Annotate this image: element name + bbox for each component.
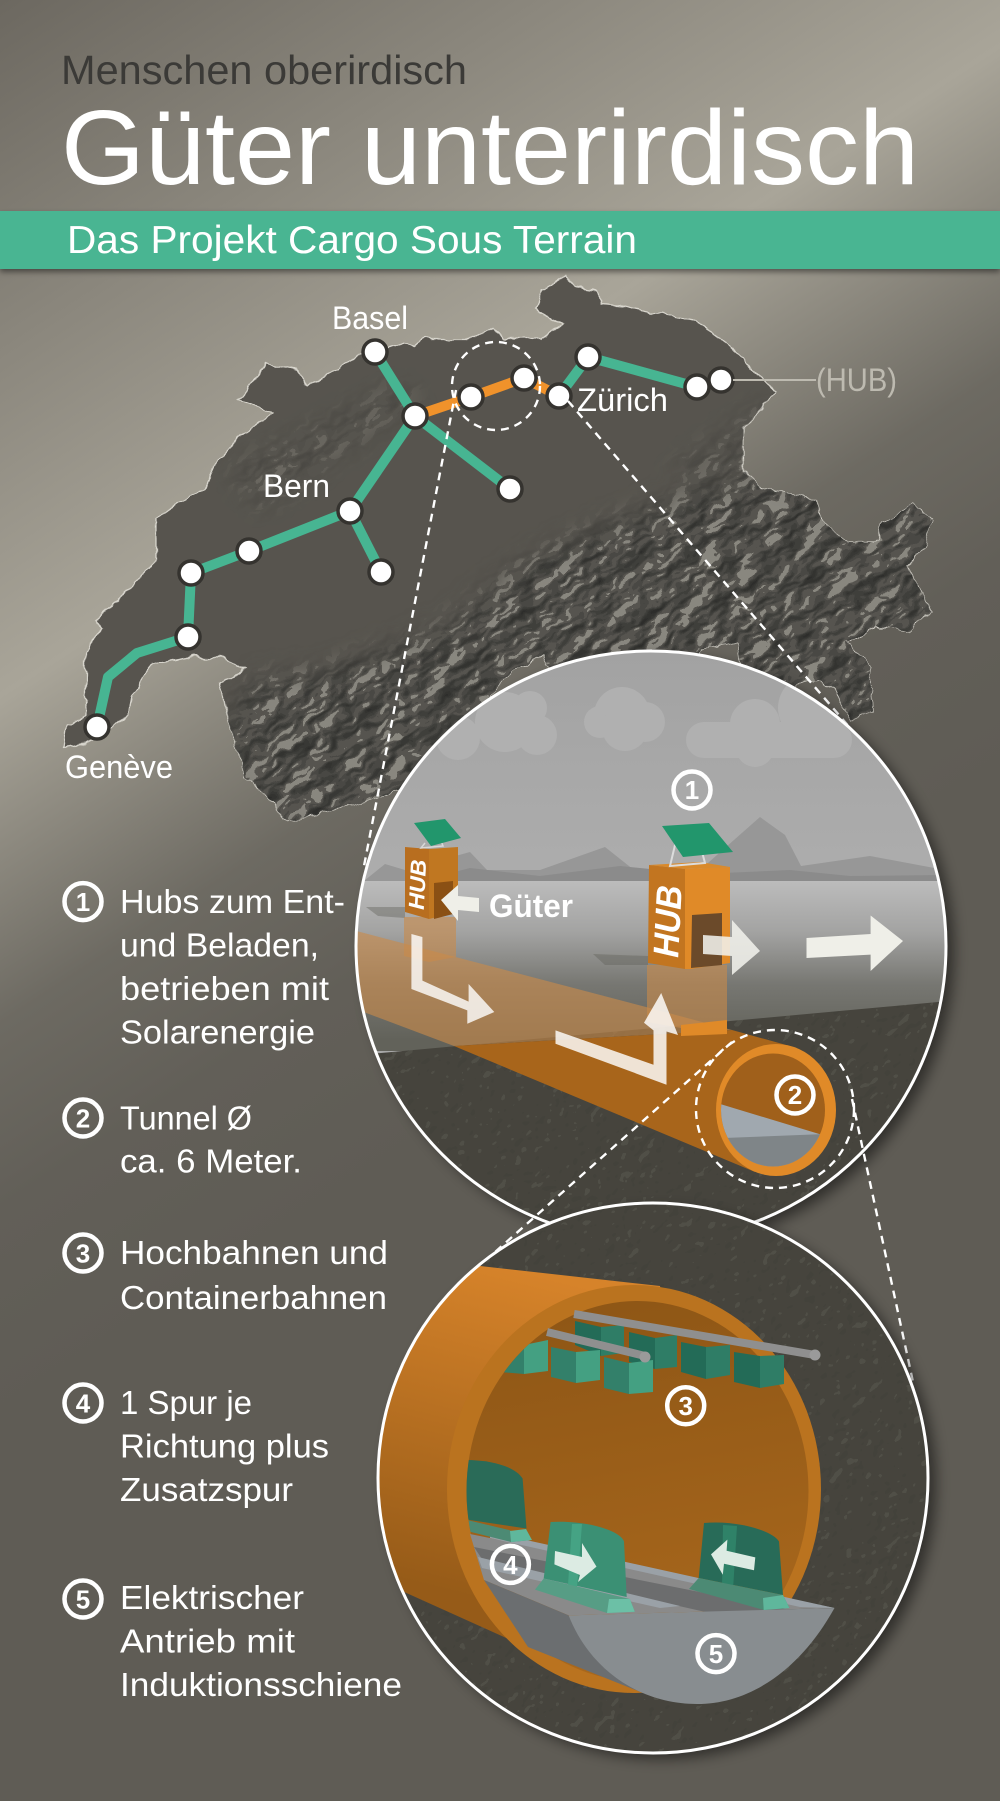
vehicle with right arrow (535, 1522, 635, 1613)
front row of containers (500, 1340, 653, 1394)
map: green routes (97, 352, 697, 727)
distant mountains (364, 817, 945, 881)
legend item 1 (64, 883, 345, 1050)
legend item 3: 3 (76, 1238, 90, 1268)
legend item 2 (64, 1100, 302, 1180)
legend item 2: 2 (76, 1104, 90, 1134)
tunnel outer body (380, 1266, 660, 1693)
tunnel mouth (716, 1044, 836, 1180)
subtitle: Menschen oberirdisch (61, 47, 467, 93)
legend (64, 883, 402, 1703)
underground ground (378, 1002, 939, 1222)
map of Switzerland (62, 274, 934, 822)
map: Zürich label: Zürich (577, 382, 668, 418)
heading band: Das Projekt Cargo Sous Terrain (67, 219, 637, 262)
tunnel interior (466, 1301, 808, 1681)
arrow: down and into tunnel (411, 934, 494, 1024)
legend item 5: Elektrischer (120, 1579, 304, 1616)
legend item 2: Tunnel Ø (120, 1100, 252, 1136)
badge 5 (698, 1635, 734, 1672)
title: Güter unterirdisch (61, 89, 919, 207)
legend item 5: Antrieb mit (120, 1622, 295, 1660)
circle outline (356, 651, 946, 1241)
panel: tunnel detail circle (360, 1195, 940, 1765)
badge 1: 1 (685, 775, 699, 805)
arrow: out of large hub (703, 920, 760, 975)
badge 4 (492, 1546, 529, 1583)
badge 1 (674, 772, 710, 808)
map: Genève label: Genève (65, 749, 173, 785)
legend item 1: und Beladen, (120, 926, 319, 964)
legend item 5: Induktionsschiene (120, 1666, 402, 1703)
small hub (404, 819, 461, 962)
legend item 1: 1 (76, 887, 90, 917)
boat shadows (366, 907, 648, 965)
badge 4: 4 (503, 1550, 518, 1580)
legend item 1: Hubs zum Ent- (120, 883, 345, 920)
arrow: tunnel up to hub (556, 993, 678, 1085)
map: orange route (415, 378, 559, 416)
small hub: HUB (404, 859, 431, 910)
track deck (470, 1532, 834, 1615)
circle outline (378, 1203, 928, 1753)
heading band (0, 211, 1000, 269)
large hub (645, 823, 733, 1036)
vehicle with left arrow (689, 1522, 789, 1610)
legend item 5: 5 (76, 1584, 90, 1614)
legend item 1: Solarenergie (120, 1014, 315, 1050)
badge 3: 3 (678, 1391, 693, 1421)
tunnel solid section (454, 1030, 797, 1172)
map: Bern label: Bern (263, 468, 330, 504)
badge 3 (667, 1387, 704, 1424)
label: Güter: Güter (489, 888, 573, 924)
tunnel rim (447, 1285, 821, 1693)
large hub: HUB (645, 884, 690, 958)
legend item 4: Zusatzspur (120, 1471, 293, 1508)
legend item 4 (64, 1384, 329, 1508)
legend item 3: Containerbahnen (120, 1279, 387, 1316)
map: Basel label: Basel (332, 300, 408, 336)
arrow: goods leaving (806, 916, 903, 971)
legend item 2: ca. 6 Meter. (120, 1143, 302, 1180)
legend item 3 (64, 1234, 388, 1316)
badge 2: 2 (788, 1080, 802, 1110)
legend item 4: Richtung plus (120, 1428, 329, 1464)
legend item 3: Hochbahnen und (120, 1234, 388, 1271)
back row of containers (575, 1321, 784, 1388)
legend item 4: 4 (76, 1388, 91, 1418)
vehicle back left (463, 1460, 532, 1542)
map: station nodes (85, 340, 733, 739)
deck side (484, 1580, 643, 1693)
legend item 5 (64, 1579, 402, 1703)
sky (350, 645, 960, 885)
guide lines to tunnel detail (494, 1030, 913, 1382)
rock texture (421, 1205, 926, 1751)
legend item 4: 1 Spur je (120, 1384, 252, 1421)
badge 5: 5 (709, 1639, 723, 1669)
water / foreground haze (350, 881, 960, 1051)
rail back (574, 1314, 820, 1360)
map: country shape with relief (62, 274, 934, 822)
panel: surface and tunnel cross-section circle (340, 645, 960, 1260)
arrow: goods into small hub (441, 885, 479, 921)
magnifier guide lines from map (364, 342, 870, 866)
tunnel translucent section above ground (345, 928, 732, 1046)
legend item 1: betrieben mit (120, 970, 329, 1007)
rail front (547, 1332, 650, 1362)
badge 2 (776, 1076, 814, 1114)
deck front (569, 1608, 834, 1704)
map: hub leader and label: (HUB) (816, 362, 897, 398)
clouds (438, 686, 852, 766)
